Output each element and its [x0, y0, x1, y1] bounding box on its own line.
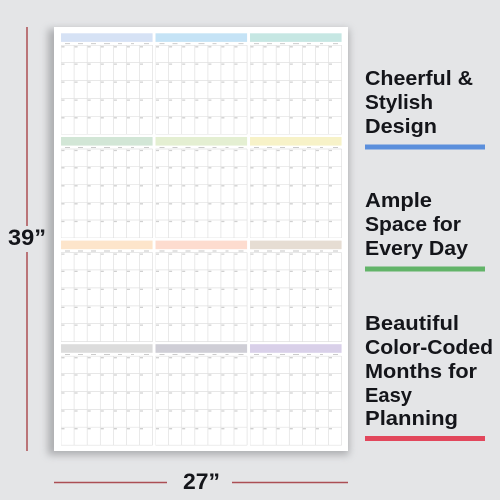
paper shadow — [48, 29, 349, 455]
feature: cheerful and stylish design — [365, 68, 485, 150]
month: row 2 column 2 — [156, 137, 247, 238]
feature: color-coded months: Planning — [365, 408, 458, 430]
feature: cheerful and stylish design: Cheerful & — [365, 68, 473, 90]
month: row 3 column 2 — [156, 241, 247, 342]
month: row 3 column 1 — [61, 241, 153, 342]
month: row 1 column 1 — [61, 33, 153, 134]
feature: color-coded months: Easy — [365, 385, 413, 407]
feature: color-coded months: Color-Coded — [365, 337, 493, 359]
feature: ample space: Every Day — [365, 238, 469, 260]
month: row 2 column 1 — [61, 137, 153, 238]
feature: color-coded months: Months for — [365, 361, 477, 383]
month: row 1 column 2 — [156, 33, 247, 134]
month: row 4 column 2 — [156, 344, 247, 445]
feature: ample space — [365, 190, 485, 272]
feature: ample space: Ample — [365, 190, 432, 212]
month: row 2 column 3 — [250, 137, 342, 238]
month: row 1 column 3 — [250, 33, 342, 134]
month: row 3 column 3 — [250, 241, 342, 342]
feature: cheerful and stylish design: Stylish — [365, 92, 433, 114]
feature: ample space: Space for — [365, 214, 461, 236]
height dimension: 39 inches: 39” — [8, 225, 46, 250]
calendar poster — [54, 27, 348, 451]
width dimension: 27 inches: 27” — [183, 469, 220, 494]
feature: color-coded months: Beautiful — [365, 313, 459, 335]
feature: cheerful and stylish design: Design — [365, 116, 437, 138]
month: row 4 column 3 — [250, 344, 342, 445]
month: row 4 column 1 — [61, 344, 153, 445]
feature: color-coded months — [365, 313, 493, 441]
